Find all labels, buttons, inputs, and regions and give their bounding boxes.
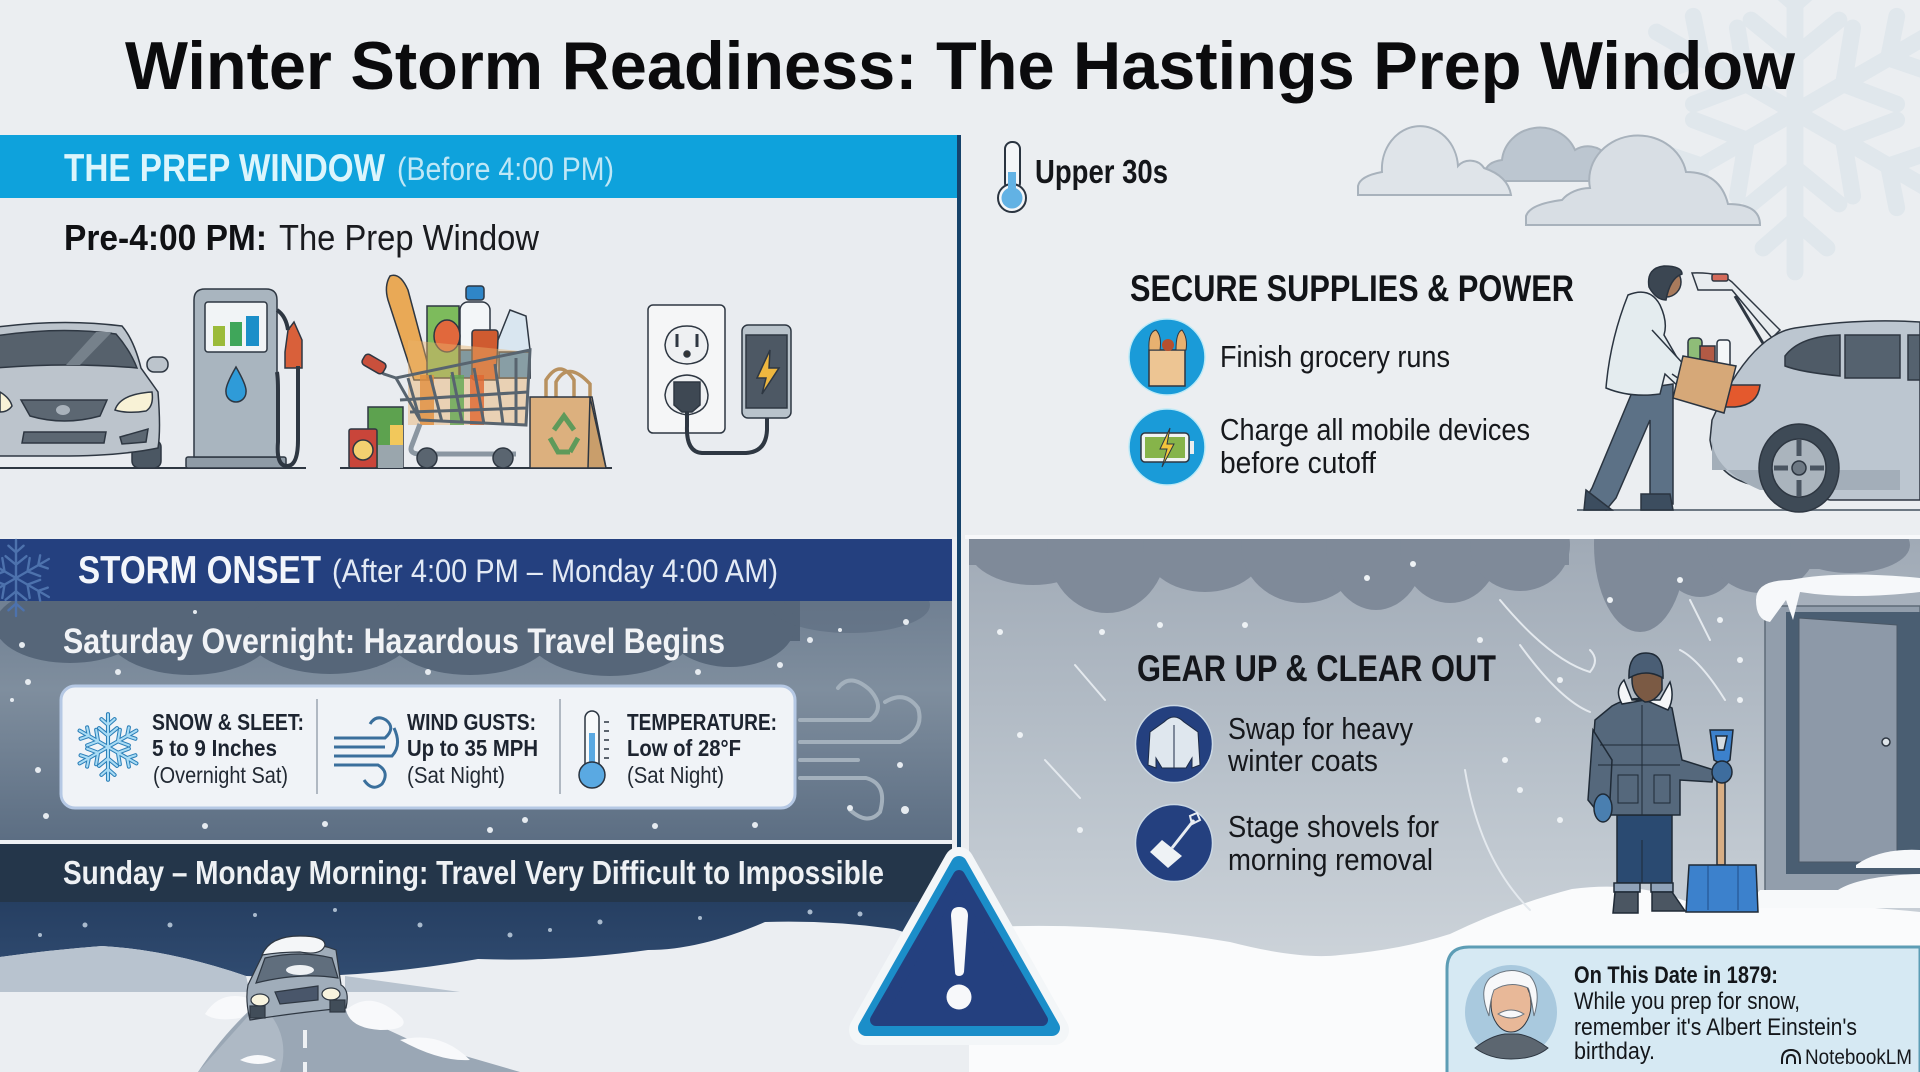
stat: temperature: TEMPERATURE: [627, 709, 777, 735]
stat: temperature: Low of 28°F [627, 735, 741, 761]
panel: right top divider strip [965, 535, 1920, 539]
icon: shopping cart with groceries [340, 275, 612, 468]
storm onset header [0, 539, 952, 616]
illustration: person loading groceries [1584, 266, 1736, 510]
stat: snow and sleet: SNOW & SLEET: [152, 709, 304, 735]
item: finish grocery runs: Finish grocery runs [1220, 339, 1450, 374]
illustration: person with shovel [1588, 653, 1758, 913]
stat: wind gusts: (Sat Night) [407, 762, 505, 788]
icon: fuel pump [186, 289, 302, 468]
icon: wall outlet and phone [648, 305, 791, 453]
storm clouds right [969, 539, 1910, 632]
illustration: car with open hatch [1577, 273, 1920, 512]
prep window subheading: The Prep Window [279, 217, 540, 258]
stat: snow and sleet [152, 709, 304, 788]
item: finish grocery runs [1129, 319, 1450, 395]
callout text: While you prep for snow, [1574, 988, 1800, 1015]
item: winter coats: winter coats [1227, 743, 1378, 778]
storm onset header: STORM ONSET [78, 549, 321, 592]
callout text: remember it's Albert Einstein's [1574, 1014, 1857, 1041]
vertical divider [957, 135, 961, 857]
icon: warning triangle [864, 862, 1054, 1030]
item: winter coats: Swap for heavy [1228, 711, 1413, 746]
item: stage shovels: Stage shovels for [1228, 809, 1439, 844]
decorative large snowflake [1634, 0, 1920, 272]
wind swirls [800, 680, 920, 819]
stat: wind gusts: Up to 35 MPH [407, 735, 538, 761]
snowfall right [997, 561, 1783, 833]
icon: wind [334, 718, 398, 787]
item: stage shovels: morning removal [1228, 842, 1433, 877]
panel: prep window [0, 135, 960, 537]
item: charge devices: before cutoff [1220, 445, 1376, 480]
night snowfall [38, 908, 862, 938]
panel: storm onset [0, 539, 952, 840]
illustration: door with snow [1745, 574, 1920, 908]
snow ground [969, 887, 1920, 1072]
icon: thermometer upper 30s [998, 142, 1026, 212]
item: charge devices [1129, 409, 1530, 485]
storm clouds [0, 601, 930, 676]
callout text: On This Date in 1879: [1574, 962, 1778, 989]
title: Winter Storm Readiness: The Hastings Prep Window [125, 28, 1796, 104]
sunday heading bar: Sunday – Monday Morning: Travel Very Difficult to Impossible [63, 854, 884, 891]
callout text: birthday. [1574, 1038, 1655, 1065]
panel: right top supplies and power [998, 126, 1920, 512]
stat: temperature [627, 709, 777, 788]
section heading: gear up: GEAR UP & CLEAR OUT [1137, 648, 1496, 689]
prep window subheading [64, 217, 540, 258]
wind snow streaks [1045, 600, 1815, 910]
temperature label: Upper 30s [1035, 153, 1168, 190]
saturday overnight heading: Saturday Overnight: Hazardous Travel Begins [63, 622, 725, 661]
weather stats card [61, 686, 795, 808]
stat: temperature: (Sat Night) [627, 762, 724, 788]
icon: thermometer [579, 711, 609, 788]
item: stage shovels [1136, 804, 1439, 882]
prep window subheading: Pre-4:00 PM: [64, 217, 267, 258]
prep window header bar: THE PREP WINDOW [64, 147, 385, 190]
stat: snow and sleet: 5 to 9 Inches [152, 735, 277, 761]
item: charge devices: Charge all mobile devices [1220, 412, 1530, 447]
icon: header snowflake [0, 540, 54, 616]
snowfall [10, 610, 909, 833]
icon: einstein portrait [1465, 965, 1557, 1059]
icon: recycling bag [530, 369, 606, 468]
snowy hills [0, 922, 960, 1072]
section heading: secure supplies: SECURE SUPPLIES & POWER [1130, 268, 1574, 309]
panel: gear up and clear out [969, 539, 1920, 1072]
illustration: clouds [1358, 126, 1760, 225]
prep window header bar [0, 135, 960, 198]
snowy road [198, 1010, 520, 1072]
callout: einstein birthday [1447, 947, 1920, 1072]
stat: wind gusts [407, 709, 538, 788]
panel: sunday to monday [0, 840, 960, 1072]
sunday heading bar [0, 844, 952, 902]
storm onset header: (After 4:00 PM – Monday 4:00 AM) [332, 553, 778, 589]
icon: car front [0, 322, 306, 468]
callout text [1574, 962, 1857, 1065]
icon: snowflake [75, 714, 141, 780]
icon: snow covered car [247, 936, 347, 1020]
item: winter coats [1136, 706, 1413, 782]
stat: snow and sleet: (Overnight Sat) [153, 762, 288, 788]
stat: wind gusts: WIND GUSTS: [407, 709, 536, 735]
prep window header bar: (Before 4:00 PM) [397, 151, 614, 187]
